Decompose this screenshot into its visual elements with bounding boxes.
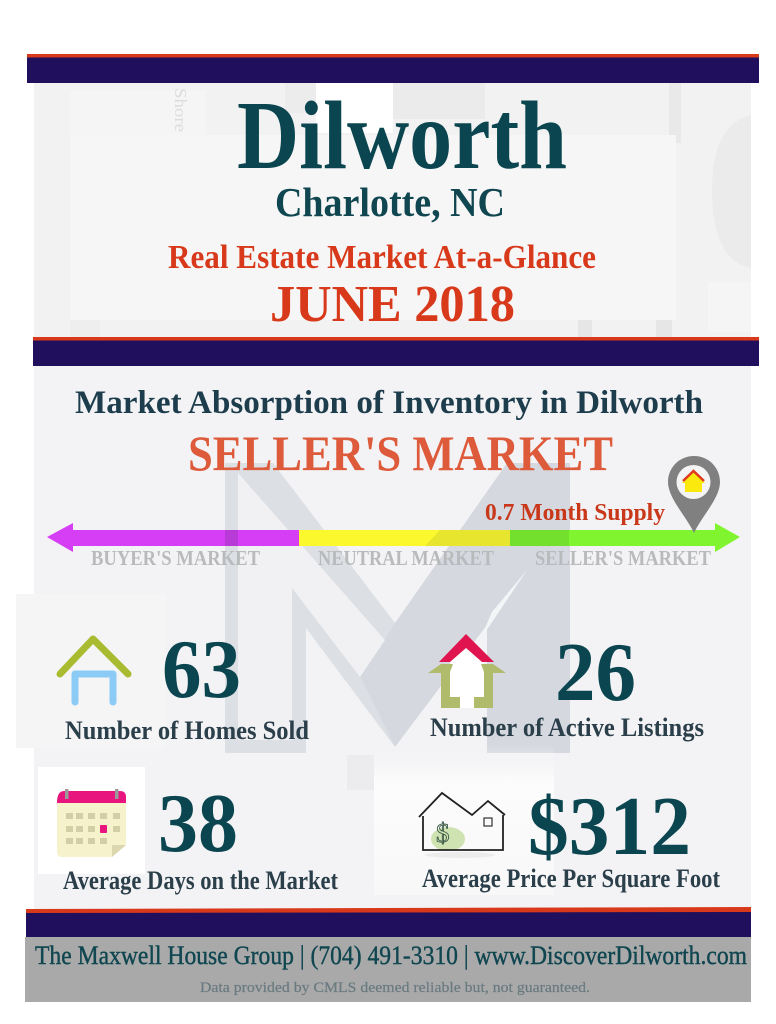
heading: June 2018: JUNE 2018 (270, 276, 515, 333)
title: Dilworth: Dilworth (237, 82, 567, 190)
callout: 0.7 month supply: 0.7 Month Supply (485, 500, 665, 526)
stat: 38: 38 (158, 777, 238, 870)
stat: $312: $312 (528, 780, 691, 873)
icon: map pin with house (668, 456, 720, 533)
subtitle: Charlotte, NC: Charlotte, NC (275, 179, 505, 225)
heading: Market Absorption: Market Absorption of Inventory in Dilworth (75, 385, 703, 421)
icon: active listings house (428, 634, 506, 708)
watermark: M logo (225, 463, 570, 895)
scale label: seller's market: SELLER'S MARKET (535, 546, 711, 570)
label: average price per square foot: Average Price Per Square Foot (422, 864, 720, 893)
label: number of homes sold: Number of Homes Sold (65, 716, 310, 745)
chart: market scale arrow (47, 523, 740, 552)
panel: homes sold backdrop (16, 594, 166, 748)
panel: header map background: Shore (171, 88, 190, 132)
label: number of active listings: Number of Active Listings (430, 713, 704, 742)
panel: footer contact (25, 937, 751, 1002)
label: average days on the market: Average Days on the Market (63, 866, 338, 895)
stat: 26: 26 (555, 626, 636, 719)
heading: Real Estate Market At-a-Glance: Real Estate Market At-a-Glance (168, 239, 596, 276)
icon: house with dollar sign (419, 793, 505, 858)
header bar: middle (33, 337, 759, 366)
panel: market section background (34, 366, 751, 910)
header bar: top (27, 54, 759, 83)
heading: Seller's Market: SELLER'S MARKET (188, 425, 613, 481)
stat: 63: 63 (162, 623, 241, 716)
footer bar (26, 907, 751, 937)
panel: header map background (34, 83, 751, 338)
scale label: buyer's market: BUYER'S MARKET (91, 546, 260, 570)
icon: house sold (60, 639, 128, 702)
scale label: neutral market: NEUTRAL MARKET (318, 546, 494, 570)
panel: calendar backdrop (38, 767, 145, 874)
icon: house with dollar sign: $ (436, 818, 450, 848)
icon: calendar (57, 789, 126, 857)
footer disclaimer: Data provided by CMLS deemed reliable but, not guaranteed. (200, 980, 590, 996)
